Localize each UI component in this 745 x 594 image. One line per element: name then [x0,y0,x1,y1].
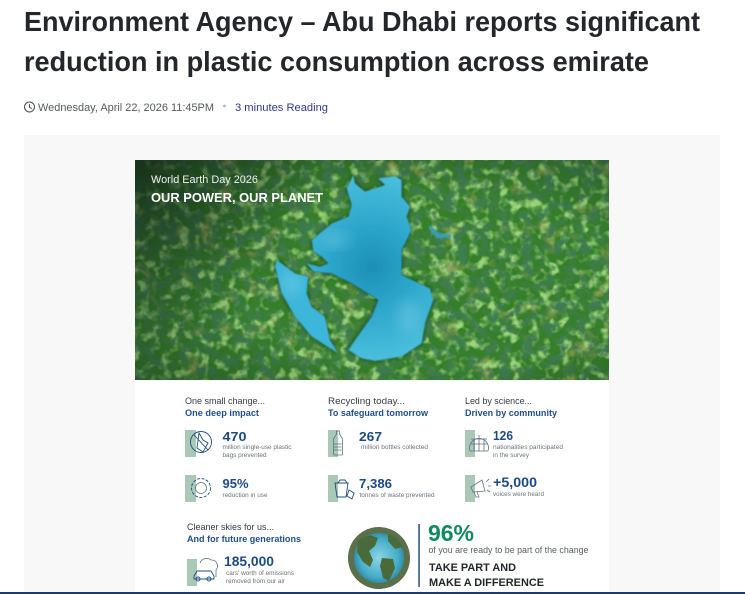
hero caption: OUR POWER, OUR PLANET [151,190,323,205]
stat: +5,000 voices: voices were heard [493,491,544,498]
stat: 95% reduction [185,475,268,502]
stat: 185,000 cars: removed from our air [226,578,286,585]
icon: clock [24,102,34,112]
column: one small change: One deep impact [185,408,260,419]
call to action: of you are ready to be part of the change [428,545,588,555]
stat: 7,386 tonnes of waste: tonnes of waste prevented [360,492,435,499]
column: recycling today: To safeguard tomorrow [328,408,429,419]
infographic card [135,160,609,594]
stat: 267 million bottles: million bottles collected [361,444,428,451]
article title: Environment Agency – Abu Dhabi reports significant [24,6,700,37]
stat: 126 nationalities [465,428,563,459]
stat: 95% reduction: 95% [222,476,249,491]
article meta line [24,102,328,114]
column: led by science: Driven by community [465,408,558,419]
hero caption [151,174,323,205]
column: recycling today [328,396,435,502]
column: led by science [465,396,563,502]
call to action: 96% [428,520,474,546]
bottom navy bar [0,592,745,594]
column: led by science: Led by science... [465,396,532,407]
section: cleaner skies [187,522,301,586]
stat: +5,000 voices: +5,000 [493,474,537,490]
stat: 126 nationalities: 126 [493,428,513,443]
article meta line: 3 minutes Reading [235,102,328,114]
stat: 126 nationalities: nationalities participated [493,444,563,451]
stat: 95% reduction: reduction in use [222,492,268,499]
stat: 126 nationalities: in the survey [493,452,530,459]
stat: 470 million bags [185,429,292,459]
call to action [428,520,588,589]
article title: reduction in plastic consumption across emirate [24,46,649,77]
world-shaped lake [275,175,452,361]
stat: 7,386 tonnes of waste: 7,386 [359,476,392,491]
stat: 470 million bags: million single-use plastic [222,444,292,451]
hero image: forest with world-shaped lake [135,160,609,380]
column: recycling today: Recycling today... [328,396,405,407]
stat: 7,386 tonnes of waste [328,475,435,502]
stat: 185,000 cars: cars' worth of emissions [226,570,295,577]
stat: 470 million bags: bags prevented [222,452,267,459]
stat: 185,000 cars: 185,000 [224,553,274,569]
grey article image panel [24,135,720,594]
divider [418,524,420,587]
hero caption: World Earth Day 2026 [151,174,258,186]
stat: 470 million bags: 470 [222,429,246,444]
article meta line: Wednesday, April 22, 2026 11:45PM [38,102,214,114]
column: one small change [185,396,292,502]
globe illustration [348,527,410,589]
stat: +5,000 voices [465,474,544,502]
article title [24,6,700,77]
column: one small change: One small change... [185,396,265,407]
stat: 267 million bottles: 267 [359,429,382,444]
section: cleaner skies: Cleaner skies for us... [187,522,274,533]
section: cleaner skies: And for future generations [187,534,301,545]
stat: 185,000 cars [187,553,295,586]
call to action: TAKE PART AND [429,562,516,574]
stat: 267 million bottles [328,429,428,457]
call to action: MAKE A DIFFERENCE [429,577,544,589]
